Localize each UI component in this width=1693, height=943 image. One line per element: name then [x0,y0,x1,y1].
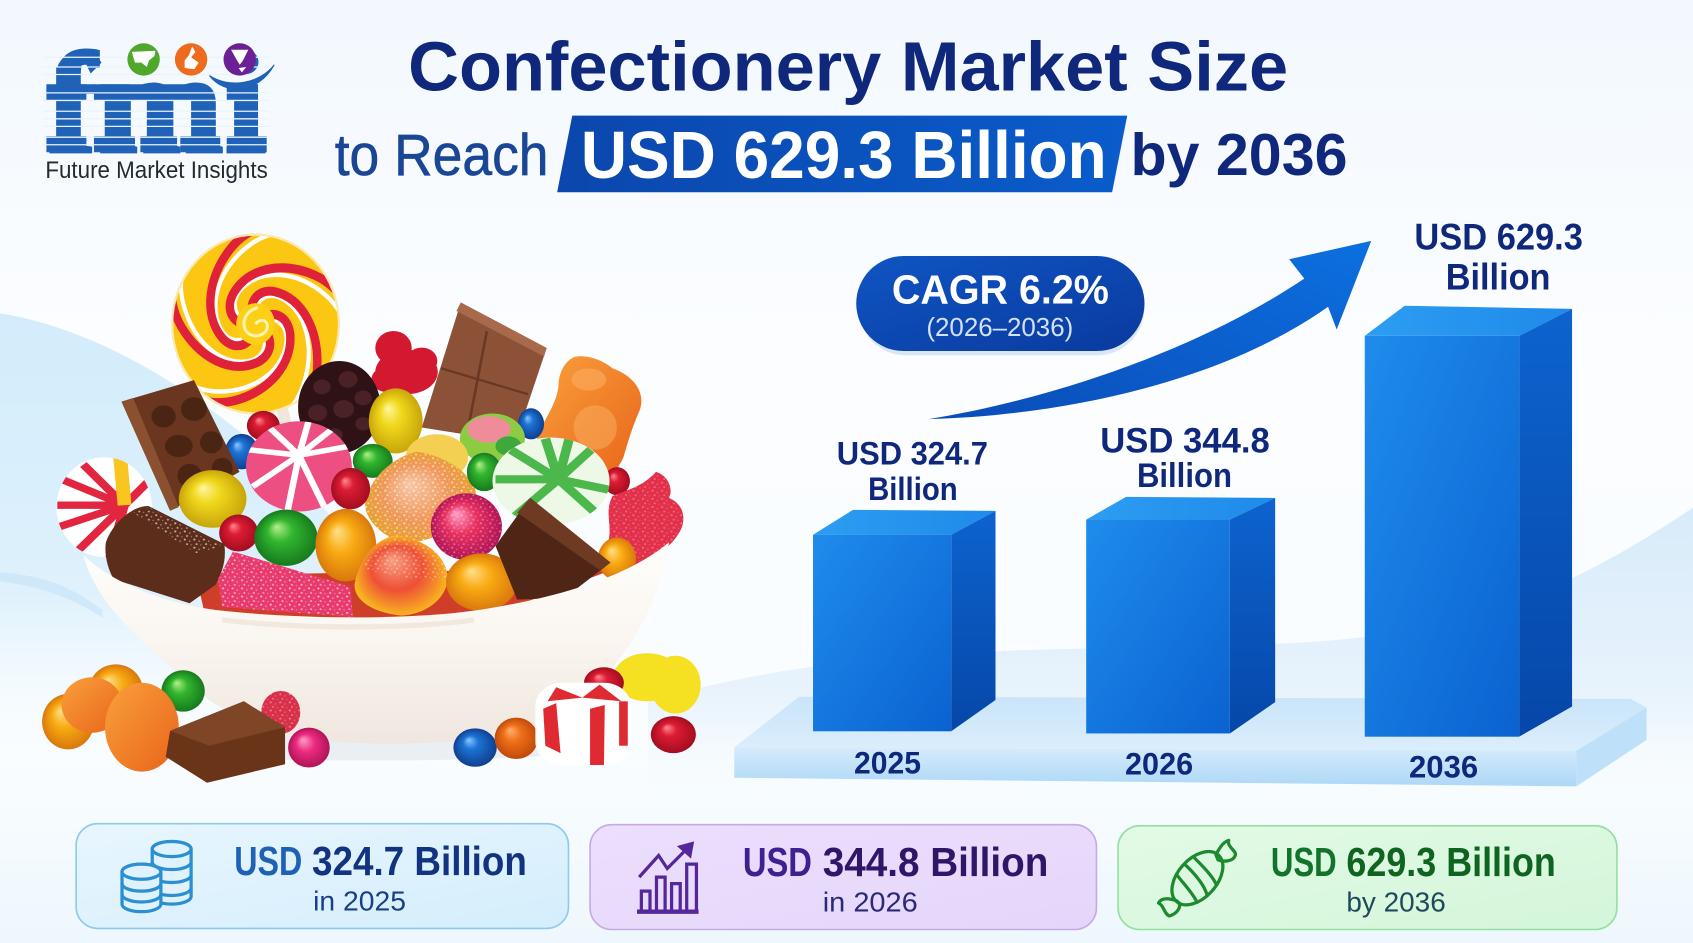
title line 2: by 2036: by 2036 [1130,121,1347,188]
amount: 629.3 Billion [1346,839,1556,885]
value label: 2025 [837,435,988,507]
amount: USD [234,838,302,884]
amount: USD [1271,839,1337,885]
year label: 2036: 2036 [1409,750,1478,785]
year: in 2025 [313,886,406,917]
pink striped candy [246,420,352,513]
value label: 2036: Billion [1446,256,1550,297]
lollipop [171,234,340,414]
yellow gummy [613,653,701,714]
value label: 2025: Billion [868,471,958,507]
bowl [83,542,669,744]
logo: FMI [43,22,274,184]
pink ball [288,728,330,768]
red sugar candy [261,691,300,734]
small green-blue ball [353,444,393,478]
amount: 324.7 Billion [312,838,527,884]
logo letters: fmi [46,22,267,184]
sugared peach candy [365,452,476,544]
growth arrow [929,241,1371,419]
pill body [856,256,1145,351]
yellow egg [369,388,423,453]
chocolate chunk front [166,701,285,783]
CAGR period: (2026–2036) [926,314,1073,342]
bar: 2025 [813,510,996,731]
red-white striped drum candy [535,683,631,766]
chocolate bar, big [422,302,547,442]
red ball lower [219,514,258,551]
title line 2: to Reach: to Reach [335,123,548,188]
icon: wrapped candy [1159,840,1235,916]
green ball [467,453,502,491]
green striped candy [492,438,613,525]
green ball large [254,510,318,566]
icon: growth chart [637,844,699,912]
ground shadow [127,731,613,761]
backing candies inside bowl [196,553,656,622]
gummy bears left [42,664,205,772]
blue ball [453,728,497,767]
dark chocolate chunk [495,498,610,600]
year: in 2026 [823,887,918,918]
small balls, back [225,408,630,495]
card: 2026 [590,825,1096,929]
title [335,28,1347,193]
chocolate roll [105,506,225,603]
red gummy right [608,472,683,566]
icon: coins [122,841,191,912]
orange ball right [598,537,636,580]
amount: 344.8 Billion [823,839,1048,885]
bar: 2036 [1365,306,1572,737]
bar: 2026 [1086,497,1275,733]
title highlight value: USD 629.3 Billion [581,118,1107,193]
orange ball [495,718,538,759]
CAGR pill [856,256,1145,355]
bar chart [734,217,1647,786]
yellow ball [179,470,246,528]
CAGR value: CAGR 6.2% [892,267,1109,313]
logo globe: orange [175,43,207,76]
logo stripes [43,57,270,145]
card: 2025 [76,824,568,928]
year label: 2026: 2026 [1125,746,1193,781]
logo swoosh [209,65,274,89]
background wave: right [648,508,1693,821]
value label: 2026: Billion [1137,457,1232,495]
logo globe: green [127,43,160,76]
red ball behind drum [584,667,624,698]
amount [234,838,527,884]
logo wordmark: Future Market Insights [45,157,268,184]
background wave: left [0,313,358,778]
orange egg [315,509,376,581]
chocolate bar, left [122,380,240,511]
chart platform [734,697,1647,786]
year: by 2036 [1346,887,1446,918]
rainbow sugar ball [460,413,525,464]
title line 1: Confectionery Market Size [408,28,1288,106]
card body [1118,826,1617,929]
left striped candy [56,457,152,559]
red ball right [651,716,696,753]
value label: 2026: USD 344.8 [1100,421,1270,461]
logo globe: purple [224,43,256,76]
background wave: lower left band [0,572,103,618]
pink sugar ball [431,493,502,560]
year label: 2025: 2025 [854,745,921,780]
orange gummy bear [537,356,641,479]
card: 2036 [1118,826,1617,929]
value label: 2026 [1100,421,1270,495]
lollipop stick [274,398,294,433]
value label: 2036: USD 629.3 [1414,217,1583,258]
title banner [557,116,1127,192]
sugared orange candy [354,536,448,615]
orange-yellow ball [446,553,517,611]
blackberry candy [298,361,381,453]
card body [590,825,1096,929]
card body [76,824,568,928]
amount: USD [743,839,812,885]
value label: 2036 [1414,217,1583,297]
value label: 2025: USD 324.7 [837,435,988,471]
soft yellow candy [406,434,468,480]
red gummy bear, back [371,331,438,394]
logo slab serifs and stems [46,52,267,152]
red ball [331,468,370,509]
pink sugar slab [218,551,353,617]
pill shadow [858,260,1145,355]
amount [1271,839,1556,885]
illustration: bowl of candy [42,206,701,783]
